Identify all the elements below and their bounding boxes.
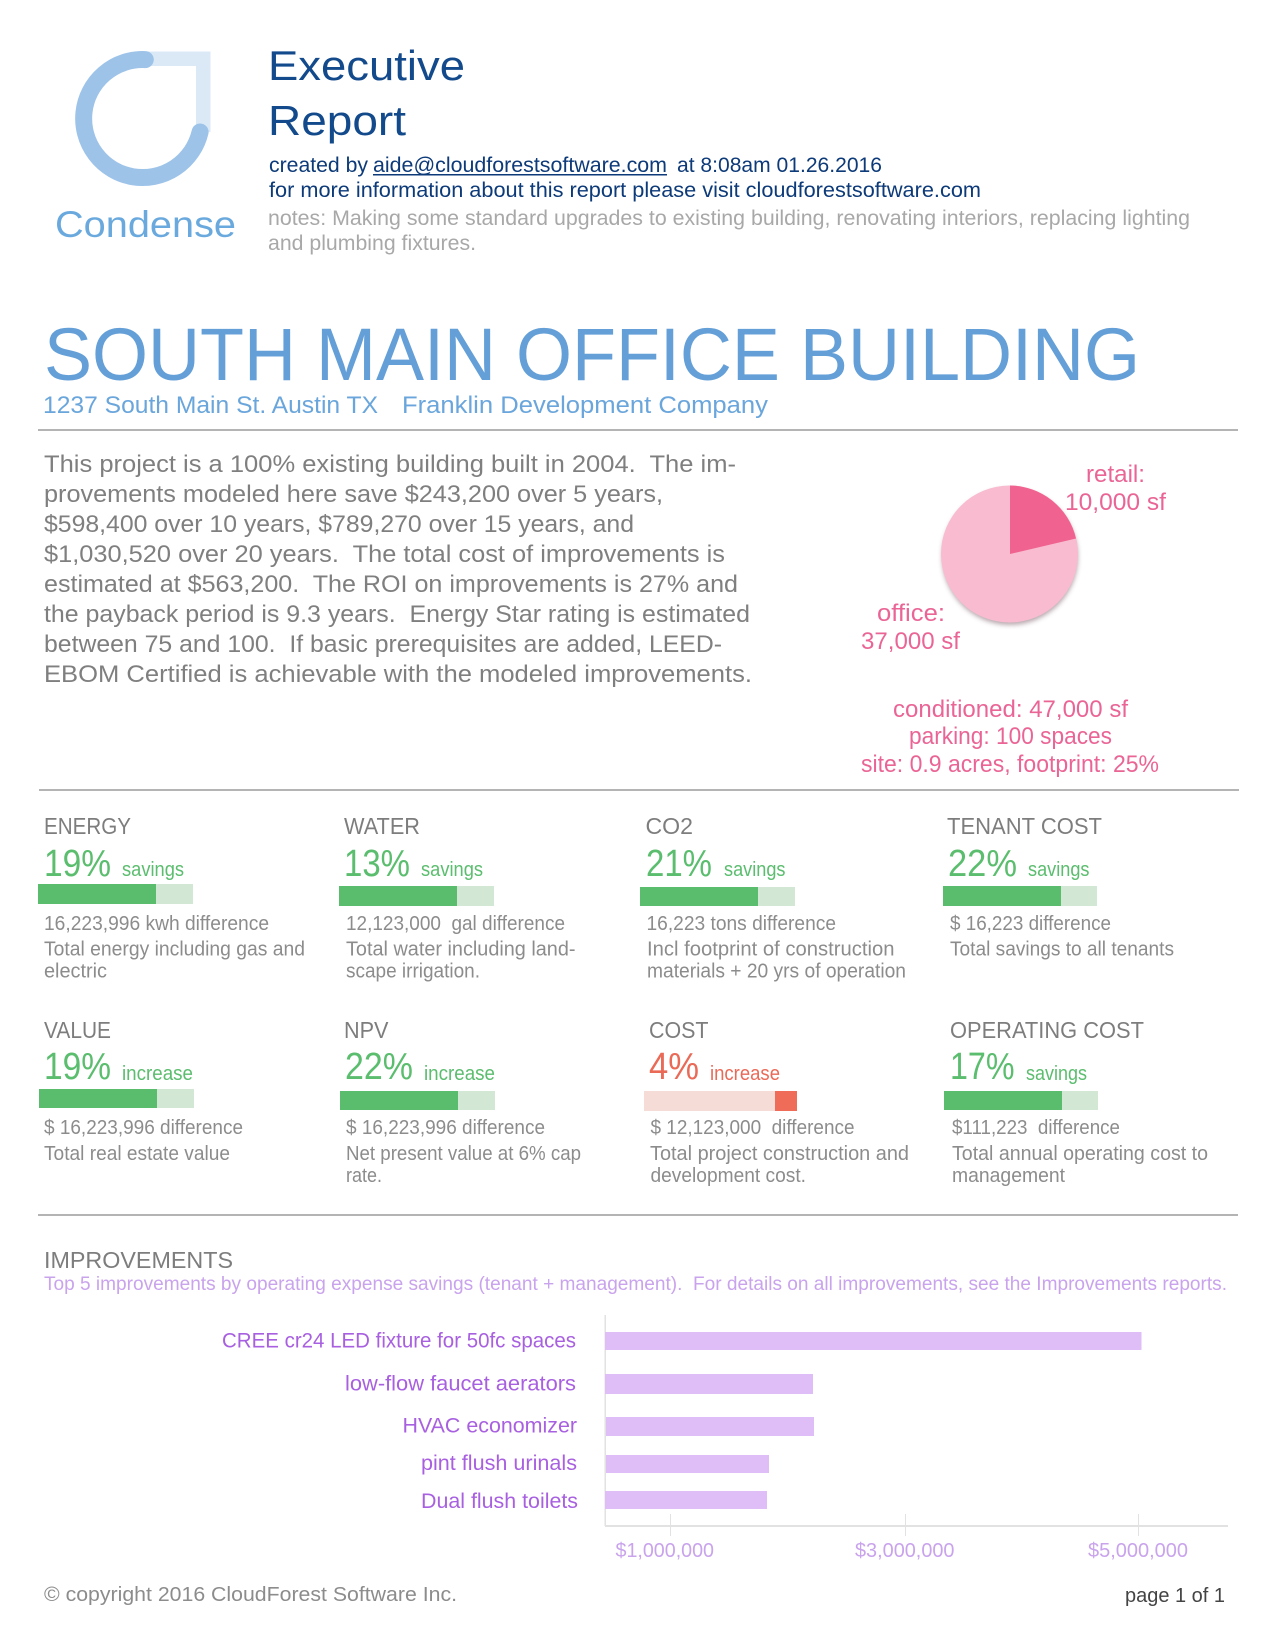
metric: tenant cost: 22%: [948, 843, 1017, 885]
bar: HVAC economizer: HVAC economizer: [402, 1414, 577, 1438]
metric: cost: COST: [649, 1017, 708, 1043]
metric: cost: increase: [710, 1063, 780, 1085]
address and company: [43, 392, 769, 419]
bar: low-flow faucet aerators: [345, 1372, 813, 1396]
address and company: Franklin Development Company: [402, 392, 769, 419]
metric: CO2: savings: [724, 859, 786, 881]
project summary paragraph: $1,030,520 over 20 years. The total cost of improvements is: [44, 541, 725, 568]
metric: operating cost: management: [952, 1165, 1065, 1187]
metric: tenant cost: TENANT COST: [947, 813, 1102, 839]
metric: NPV: [340, 1017, 581, 1187]
pie label: office: office:: [877, 600, 945, 627]
bar chart: top 5 improvements: [222, 1315, 1228, 1562]
metric: operating cost: [944, 1017, 1208, 1187]
bar: dual flush toilets: [421, 1490, 767, 1513]
heading: Executive Report: [268, 42, 465, 144]
progress bar: operating cost: [944, 1091, 1098, 1110]
pie label: office: 37,000 sf: [861, 628, 960, 655]
footer: copyright: © copyright 2016 CloudForest Software Inc.: [44, 1584, 457, 1606]
bar: low-flow faucet aerators: low-flow faucet aerators: [345, 1372, 576, 1396]
metric: water: savings: [421, 859, 483, 881]
progress bar: water: [339, 886, 494, 906]
axis labels: $1,000,000: [616, 1540, 714, 1562]
bar: pint flush urinals: pint flush urinals: [421, 1452, 577, 1475]
axes and ticks: [604, 1315, 1228, 1536]
progress bar: tenant cost: [943, 886, 1097, 906]
metric: NPV: rate.: [346, 1165, 382, 1187]
axis labels: [616, 1540, 1188, 1562]
pie label: retail: retail:: [1086, 461, 1145, 488]
metric: CO2: Incl footprint of construction: [647, 938, 894, 960]
site statistics: parking: 100 spaces: [909, 723, 1112, 750]
metric: NPV: Net present value at 6% cap: [346, 1143, 581, 1165]
metric: CO2: 21%: [646, 843, 712, 885]
project summary paragraph: between 75 and 100. If basic prerequisites are added, LEED-: [44, 631, 722, 658]
metric: energy: 19%: [44, 843, 111, 885]
metric: value: increase: [122, 1063, 193, 1085]
axis labels: $5,000,000: [1088, 1540, 1188, 1562]
bar: CREE cr24 LED: [222, 1330, 1142, 1352]
metric: water: 13%: [344, 843, 410, 885]
metric: cost: development cost.: [650, 1165, 806, 1187]
metric: water: WATER: [344, 813, 420, 839]
site statistics: [861, 696, 1159, 778]
pie label: retail: [1065, 461, 1166, 516]
metric: value: [39, 1017, 243, 1165]
metric: NPV: 22%: [345, 1046, 413, 1088]
project summary paragraph: provements modeled here save $243,200 over 5 years,: [44, 481, 663, 508]
metric: CO2: materials + 20 yrs of operation: [647, 960, 906, 982]
notes: and plumbing fixtures.: [268, 232, 476, 255]
notes: [268, 207, 1190, 255]
project summary paragraph: EBOM Certified is achievable with the modeled improvements.: [44, 661, 752, 688]
metric: operating cost: savings: [1026, 1063, 1087, 1085]
progress bar: NPV: [340, 1091, 495, 1110]
metric: energy: ENERGY: [44, 813, 131, 839]
created by line: aide@cloudforestsoftware.com: [373, 154, 667, 177]
metric: energy: [38, 813, 305, 982]
footer: page number: page 1 of 1: [1125, 1585, 1225, 1607]
metric: CO2: [640, 813, 906, 982]
more information line: for more information about this report please visit cloudforestsoftware.com: [269, 179, 981, 202]
progress bar: CO2: [640, 887, 795, 906]
project summary paragraph: [44, 451, 752, 688]
metric: value: 19%: [44, 1046, 111, 1088]
heading: Executive Report: Report: [268, 97, 406, 144]
metric: water: [339, 813, 576, 982]
address and company: 1237 South Main St. Austin TX: [43, 392, 378, 419]
bar: CREE cr24 LED: CREE cr24 LED fixture for 50fc spaces: [222, 1330, 576, 1352]
metric: cost: 4%: [649, 1046, 699, 1088]
heading: Executive Report: Executive: [268, 42, 465, 89]
metric: operating cost: OPERATING COST: [950, 1017, 1144, 1043]
site statistics: site: 0.9 acres, footprint: 25%: [861, 751, 1159, 778]
bar: pint flush urinals: [421, 1452, 769, 1475]
site statistics: conditioned: 47,000 sf: [893, 696, 1128, 723]
metric: cost: Total project construction and: [650, 1143, 909, 1165]
bar: HVAC economizer: [402, 1414, 814, 1438]
metric: operating cost: Total annual operating cost to: [952, 1143, 1208, 1165]
metric: CO2: CO2: [646, 813, 693, 839]
icon: condense drop: [84, 52, 210, 178]
created by line: [269, 154, 882, 177]
project summary paragraph: estimated at $563,200. The ROI on improvements is 27% and: [44, 571, 738, 598]
progress bar: energy: [38, 884, 193, 904]
metric: cost: [644, 1017, 909, 1187]
project summary paragraph: $598,400 over 10 years, $789,270 over 15 years, and: [44, 511, 634, 538]
metric: tenant cost: [943, 813, 1174, 960]
pie label: office: [861, 600, 960, 655]
metric: energy: electric: [44, 960, 107, 982]
project summary paragraph: This project is a 100% existing building built in 2004. The im-: [44, 451, 736, 478]
created by line: at 8:08am 01.26.2016: [677, 154, 882, 177]
metric: tenant cost: savings: [1028, 859, 1090, 881]
metric: water: 12,123,000 gal difference: [346, 913, 565, 935]
improvements description: Top 5 improvements by operating expense savings (tenant + management). For details on all improvements, see the Improvements reports.: [44, 1274, 1227, 1295]
logo: Condense: [55, 52, 236, 245]
metric: tenant cost: Total savings to all tenants: [950, 938, 1174, 960]
metric: value: Total real estate value: [44, 1143, 230, 1165]
metric: NPV: NPV: [344, 1017, 389, 1043]
metric: water: scape irrigation.: [346, 960, 480, 982]
metric: cost: $ 12,123,000 difference: [650, 1117, 854, 1139]
metric: energy: Total energy including gas and: [44, 938, 305, 960]
heading: improvements: IMPROVEMENTS: [44, 1247, 233, 1273]
progress bar: cost: [644, 1091, 797, 1111]
report heading: [268, 42, 1190, 255]
logo wordmark: Condense: [55, 204, 236, 245]
metric: operating cost: $111,223 difference: [952, 1117, 1120, 1139]
axis labels: $3,000,000: [855, 1540, 954, 1562]
metric: operating cost: 17%: [950, 1046, 1014, 1088]
created by line: created by: [269, 154, 369, 177]
metric: tenant cost: $ 16,223 difference: [950, 913, 1111, 935]
metric: value: VALUE: [44, 1017, 111, 1043]
metric: water: Total water including land-: [346, 938, 576, 960]
notes: notes: Making some standard upgrades to existing building, renovating interiors, replacing lighting: [268, 207, 1190, 230]
metric: CO2: 16,223 tons difference: [646, 913, 836, 935]
metric: energy: 16,223,996 kwh difference: [44, 913, 269, 935]
progress bar: value: [39, 1089, 194, 1108]
metric: energy: savings: [122, 859, 184, 881]
title: building name: SOUTH MAIN OFFICE BUILDING: [44, 313, 1140, 396]
metric: NPV: $ 16,223,996 difference: [346, 1117, 545, 1139]
metric: NPV: increase: [424, 1063, 495, 1085]
project summary paragraph: the payback period is 9.3 years. Energy Star rating is estimated: [44, 601, 750, 628]
pie chart: building use: [941, 486, 1078, 625]
pie label: retail: 10,000 sf: [1065, 489, 1166, 516]
metric: value: $ 16,223,996 difference: [44, 1117, 243, 1139]
bar: dual flush toilets: Dual flush toilets: [421, 1490, 578, 1513]
